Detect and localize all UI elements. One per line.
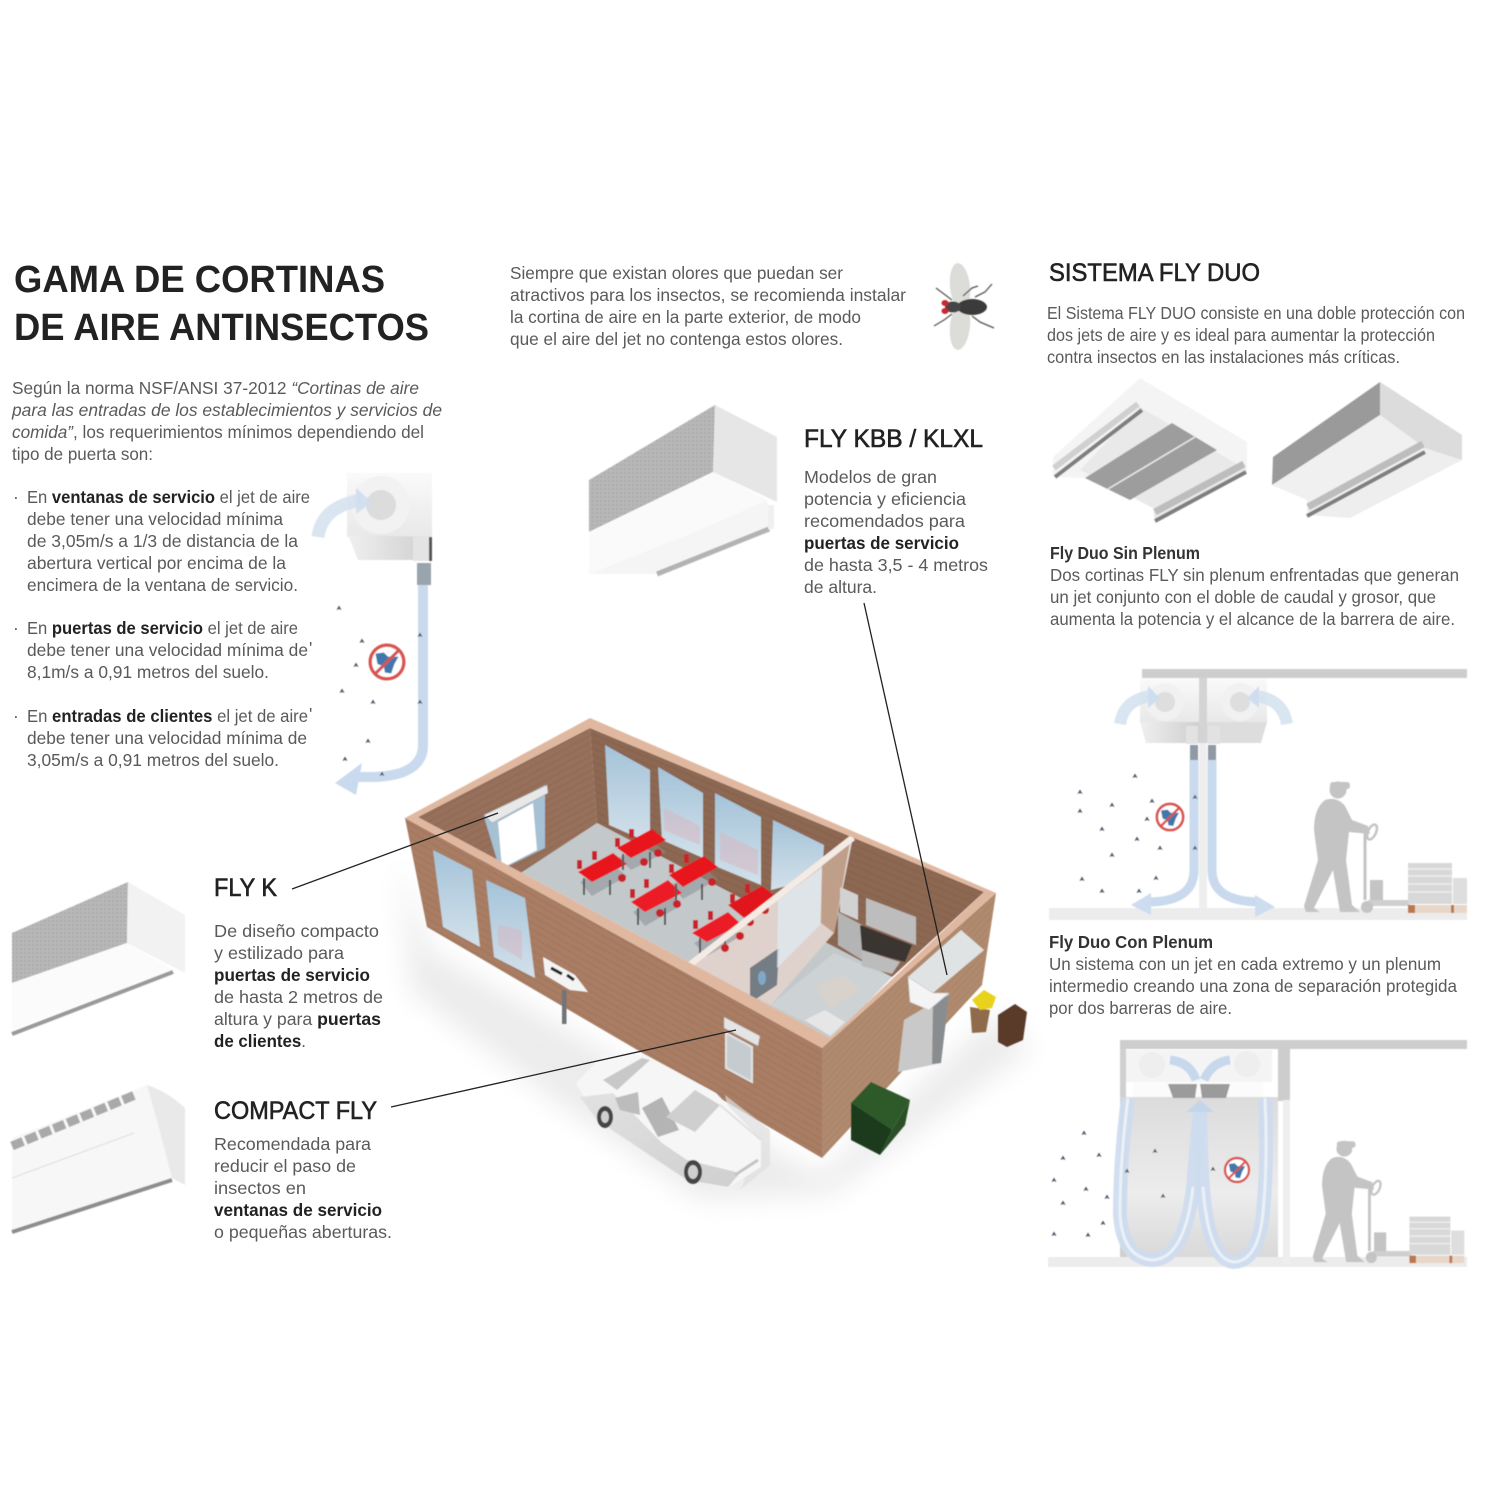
text block: Compact Fly: Recomendada para <box>214 1134 371 1154</box>
bullet: puertas de servicio: 8,1m/s a 0,91 metros del suelo. <box>27 662 269 682</box>
text block: Fly Duo Con Plenum: Un sistema con un jet en cada extremo y un plenum <box>1049 954 1441 974</box>
diagram: Fly Duo sin plenum <box>1049 669 1467 920</box>
diagram: Fly Duo con plenum <box>1048 1040 1467 1267</box>
text block: Fly K: de hasta 2 metros de <box>214 987 383 1007</box>
title: DE AIRE ANTINSECTOS <box>14 307 429 349</box>
text block: Fly Duo Sin Plenum <box>1050 565 1459 629</box>
text block: Fly Duo Con Plenum: por dos barreras de aire. <box>1049 998 1232 1018</box>
bullet: ventanas de servicio <box>13 487 310 595</box>
intro text: atractivos para los insectos, se recomienda instalar <box>510 285 906 305</box>
floor <box>418 817 892 1038</box>
service window <box>726 1033 752 1082</box>
diagram: single air jet against insects <box>318 473 432 795</box>
icon: fly <box>934 262 994 351</box>
front wall <box>405 818 822 1158</box>
title <box>14 259 429 349</box>
subheading: Fly Duo Sin Plenum: Fly Duo Sin Plenum <box>1050 543 1200 563</box>
bullet: puertas de servicio: debe tener una velocidad mínima de <box>27 640 308 660</box>
bullet: ventanas de servicio: En ventanas de servicio el jet de aire <box>27 487 310 507</box>
text block: Fly K <box>214 921 383 1051</box>
text block: Fly Duo Con Plenum: intermedio creando una zona de separación protegida <box>1049 976 1457 996</box>
text block: Fly KBB / KLXL: potencia y eficiencia <box>804 489 966 509</box>
interior walls <box>418 728 597 880</box>
bullet: puertas de servicio: En puertas de servicio el jet de aire <box>27 618 298 638</box>
product: Compact Fly <box>12 1085 185 1232</box>
partition glass <box>687 835 855 967</box>
partition door <box>750 948 779 1003</box>
heading: Compact Fly: COMPACT FLY <box>214 1097 377 1125</box>
bullet: entradas de clientes: debe tener una velocidad mínima de <box>27 728 307 748</box>
text block: Sistema Fly Duo: contra insectos en las instalaciones más críticas. <box>1047 347 1400 367</box>
intro text <box>510 263 906 349</box>
text block: Sistema Fly Duo: El Sistema FLY DUO consiste en una doble protección con <box>1047 303 1465 323</box>
text block: Fly KBB / KLXL: puertas de servicio <box>804 533 959 553</box>
leader line: Fly KBB <box>864 603 947 975</box>
front glass doors <box>433 850 480 947</box>
building illustration <box>400 718 1030 1200</box>
bullet: entradas de clientes: · <box>13 706 19 726</box>
text block: Fly KBB / KLXL: de altura. <box>804 577 877 597</box>
wall tops <box>405 718 996 1048</box>
bullet: ventanas de servicio: encimera de la ventana de servicio. <box>27 575 298 595</box>
bins <box>970 1007 990 1033</box>
leader line: Fly K <box>292 813 498 889</box>
subheading: Fly Duo Con Plenum: Fly Duo Con Plenum <box>1049 932 1213 952</box>
intro text: la cortina de aire en la parte exterior, de modo <box>510 307 861 327</box>
text block: Compact Fly: insectos en <box>214 1178 306 1198</box>
product: Fly Duo sin plenum <box>1053 378 1247 522</box>
bullet: ventanas de servicio: · <box>13 487 19 507</box>
product: Fly K <box>12 882 185 1034</box>
product: Fly Duo side unit <box>1272 382 1462 518</box>
bullet: puertas de servicio: · <box>13 618 19 638</box>
text block: Fly K: altura y para puertas <box>214 1009 381 1029</box>
text block: Compact Fly: ventanas de servicio <box>214 1200 382 1220</box>
ground shadow <box>400 860 1030 1200</box>
text block: Fly Duo Sin Plenum: Dos cortinas FLY sin plenum enfrentadas que generan <box>1050 565 1459 585</box>
heading: Fly KBB / KLXL: FLY KBB / KLXL <box>804 425 983 453</box>
intro text: Siempre que existan olores que puedan ser <box>510 263 843 283</box>
sign <box>562 990 566 1024</box>
bullet: ventanas de servicio: de 3,05m/s a 1/3 de distancia de la <box>27 531 298 551</box>
text block: Fly K: de clientes. <box>214 1031 306 1051</box>
bullet: entradas de clientes: 3,05m/s a 0,91 metros del suelo. <box>27 750 279 770</box>
kitchen units <box>840 887 858 920</box>
bullet: ventanas de servicio: debe tener una velocidad mínima <box>27 509 283 529</box>
product: Fly KBB <box>589 405 777 574</box>
right wall <box>822 893 996 1158</box>
text block: Fly Duo Sin Plenum: un jet conjunto con el doble de caudal y grosor, que <box>1050 587 1436 607</box>
bullet: ventanas de servicio: abertura vertical por encima de la <box>27 553 286 573</box>
leader line: Compact Fly <box>391 1030 736 1107</box>
text block: Fly KBB / KLXL: de hasta 3,5 - 4 metros <box>804 555 988 575</box>
text block: Compact Fly: reducir el paso de <box>214 1156 356 1176</box>
kitchen door and hood <box>898 993 949 1072</box>
text block: Fly K: De diseño compacto <box>214 921 379 941</box>
windows <box>605 745 650 843</box>
bullet: puertas de servicio <box>13 618 312 682</box>
service door <box>484 785 545 870</box>
heading: Sistema Fly Duo: SISTEMA FLY DUO <box>1049 259 1260 287</box>
text block: Compact Fly: o pequeñas aberturas. <box>214 1222 392 1242</box>
text block: Fly KBB / KLXL: recomendados para <box>804 511 965 531</box>
text block: norma NSF/ANSI: Según la norma NSF/ANSI 37-2012 “Cortinas de aire <box>12 378 419 398</box>
text block: Fly Duo Con Plenum <box>1049 954 1457 1018</box>
car <box>576 1053 770 1190</box>
text block: Fly K: y estilizado para <box>214 943 344 963</box>
text block: Sistema Fly Duo: dos jets de aire y es ideal para aumentar la protección <box>1047 325 1435 345</box>
text block: Fly K: puertas de servicio <box>214 965 370 985</box>
text block: Compact Fly <box>214 1134 392 1242</box>
text block: Sistema Fly Duo <box>1047 303 1465 367</box>
text block: Fly KBB / KLXL: Modelos de gran <box>804 467 937 487</box>
bullet: entradas de clientes: ' <box>309 704 312 724</box>
bullet: entradas de clientes <box>13 704 312 770</box>
text block: norma NSF/ANSI: tipo de puerta son: <box>12 444 153 464</box>
heading: Fly K: FLY K <box>214 874 277 902</box>
bullet: puertas de servicio: ' <box>309 638 312 658</box>
bullet: entradas de clientes: En entradas de clientes el jet de aire <box>27 706 308 726</box>
intro text: que el aire del jet no contenga estos olores. <box>510 329 843 349</box>
tables <box>577 829 778 956</box>
text block: norma NSF/ANSI: para las entradas de los establecimientos y servicios de <box>11 400 442 420</box>
text block: norma NSF/ANSI <box>11 378 442 464</box>
text block: norma NSF/ANSI: comida”, los requerimientos mínimos dependiendo del <box>12 422 424 442</box>
text block: Fly KBB / KLXL <box>804 467 988 597</box>
title: GAMA DE CORTINAS <box>14 259 385 301</box>
kitchen wall and floor <box>687 837 853 1005</box>
text block: Fly Duo Sin Plenum: aumenta la potencia y el alcance de la barrera de aire. <box>1050 609 1455 629</box>
